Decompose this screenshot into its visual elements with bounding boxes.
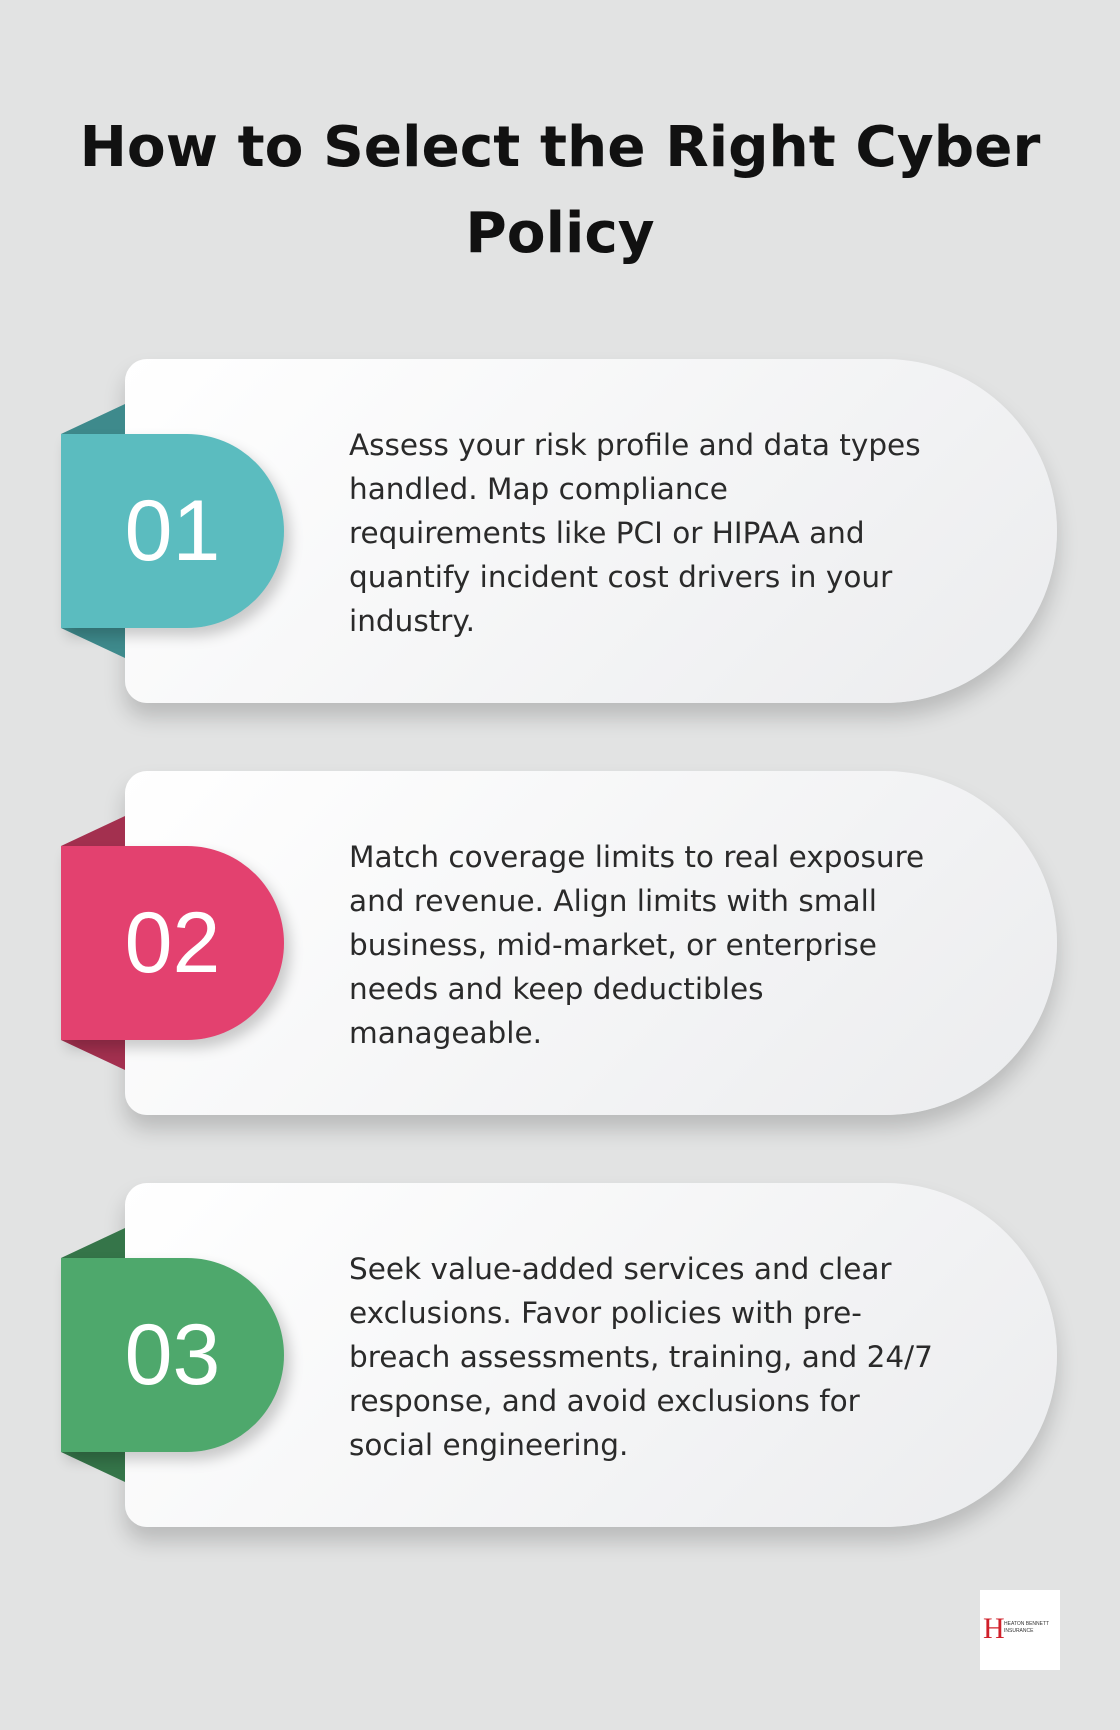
number tab 03: 03 <box>125 1307 220 1403</box>
text 1: industry. <box>349 604 475 638</box>
text 3: breach assessments, training, and 24/7 <box>349 1340 933 1374</box>
logo: H <box>983 1612 1005 1645</box>
step 3 <box>61 1183 1065 1550</box>
card 3 <box>125 1183 1057 1527</box>
text 3: exclusions. Favor policies with pre- <box>349 1296 862 1330</box>
text 1: quantify incident cost drivers in your <box>349 560 892 594</box>
fold top 1 <box>61 404 125 434</box>
text 2: and revenue. Align limits with small <box>349 884 877 918</box>
card 1 <box>125 359 1057 703</box>
step 1 <box>61 359 1065 726</box>
card 2 <box>125 771 1057 1115</box>
title: How to Select the Right Cyber <box>80 115 1040 180</box>
text 1: handled. Map compliance <box>349 472 728 506</box>
title <box>80 115 1040 266</box>
logo <box>980 1590 1060 1670</box>
text 2: needs and keep deductibles <box>349 972 764 1006</box>
text 2: Match coverage limits to real exposure <box>349 840 924 874</box>
number tab 02: 02 <box>125 895 220 991</box>
fold bottom 2 <box>61 1040 125 1070</box>
fold top 2 <box>61 816 125 846</box>
text 2: business, mid-market, or enterprise <box>349 928 877 962</box>
text 3: Seek value-added services and clear <box>349 1252 892 1286</box>
title: Policy <box>465 201 655 266</box>
logo: INSURANCE <box>1004 1628 1033 1634</box>
text 3: social engineering. <box>349 1428 628 1462</box>
text 1 <box>349 428 921 638</box>
text 2: manageable. <box>349 1016 542 1050</box>
fold top 3 <box>61 1228 125 1258</box>
number tab 02 <box>61 846 284 1040</box>
fold bottom 1 <box>61 628 125 658</box>
logo: HEATON BENNETT <box>1004 1621 1049 1627</box>
number tab 03 <box>61 1258 284 1452</box>
text 3: response, and avoid exclusions for <box>349 1384 860 1418</box>
step 2 <box>61 771 1065 1138</box>
text 2 <box>349 840 924 1050</box>
number tab 01 <box>61 434 284 628</box>
fold bottom 3 <box>61 1452 125 1482</box>
text 3 <box>349 1252 933 1462</box>
text 1: Assess your risk profile and data types <box>349 428 921 462</box>
text 1: requirements like PCI or HIPAA and <box>349 516 865 550</box>
number tab 01: 01 <box>125 483 220 579</box>
